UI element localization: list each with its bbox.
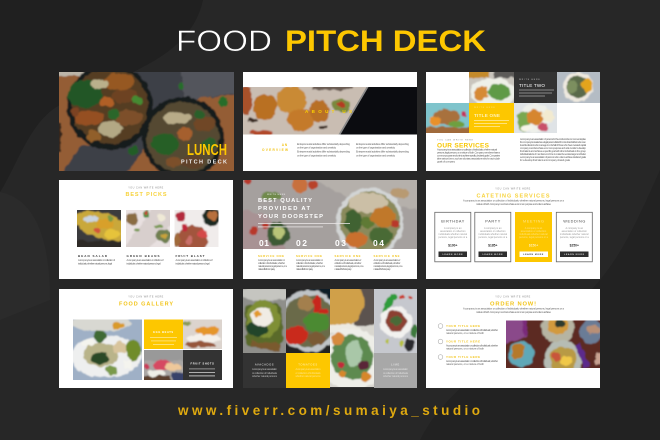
card: wedding: WEDDING: [563, 220, 585, 224]
card: wedding: association or collection: [562, 230, 588, 233]
label: tomatoes: or collection of individuals: [296, 371, 321, 375]
slide: order now: mixture of both. Company members share a common purpose and unite to achieve: [476, 310, 552, 314]
card: party: PARTY: [485, 220, 501, 224]
order item 1: natural persons, or a mixture of both: [446, 331, 485, 335]
photo: fruit blast: [174, 210, 218, 247]
gallery text: egg beats: [150, 337, 177, 345]
slide: about us: ABOUT US: [305, 109, 352, 114]
order item 1: [438, 324, 498, 335]
label: lime: or collection of individuals: [383, 371, 409, 375]
service columns: A company is an association or: [334, 258, 362, 262]
card: meeting: $150+: [529, 244, 538, 248]
service columns: collection of individuals, whether: [374, 261, 401, 265]
hero heading: [258, 194, 350, 227]
gallery text: fruit shots: [189, 368, 215, 376]
slide: food gallery: YOU CAN WRITE HERE: [128, 296, 164, 298]
captions: individuals, whether natural persons, legal: [78, 262, 112, 266]
slide: about us: [243, 72, 417, 171]
card: birthday: individuals whether natural: [439, 233, 467, 236]
photo: grain bowl: [286, 289, 330, 353]
services text: for a develop their talent and company shared goals: [520, 158, 571, 162]
service columns: SERVICE ONE: [296, 254, 322, 258]
service numbers: 01: [259, 238, 269, 248]
service columns: SERVICE ONE: [258, 254, 284, 258]
services text: goals of company: [437, 160, 456, 164]
captions: individuals, whether natural persons, legal: [126, 262, 161, 266]
label: avacados: A company is an association: [252, 367, 278, 371]
service columns: SERVICE ONE: [374, 254, 400, 258]
card: birthday: persons, legal persons or a: [438, 236, 468, 239]
slide: food columns: [243, 289, 417, 388]
card: birthday: [435, 212, 471, 262]
label: avacados: [252, 362, 278, 378]
card: meeting: [515, 212, 552, 262]
card: party: $185+: [488, 244, 498, 248]
service columns: A company is an association or: [296, 258, 323, 262]
order item 1: YOUR TITLE HERE: [446, 324, 480, 328]
service columns: SERVICE ONE: [334, 254, 361, 258]
label: avacados: whether natural persons: [252, 374, 278, 378]
service columns: A company is an association or: [374, 258, 401, 262]
photo: avocado toast: [243, 289, 286, 353]
slide: catering services: YOU CAN WRITE HERE: [495, 188, 531, 190]
service columns: mixture of both company: [296, 267, 314, 271]
about us text columns: [297, 142, 410, 158]
about us text columns: on the type of organization and creativity: [297, 146, 337, 150]
order item 3: YOUR TITLE HERE: [446, 355, 480, 359]
service numbers: 03: [335, 238, 346, 248]
title: PITCH DECK: [285, 25, 486, 58]
website url: www.fiverr.com/sumaiya_studio: [177, 403, 480, 418]
about us text columns: Entrepreneurial activities differ substantially depending: [356, 142, 410, 146]
slide: food gallery: EGG BEATS: [153, 330, 174, 334]
about us text columns: Entrepreneurial activities differ substantially depending: [297, 142, 351, 146]
card: birthday: BIRTHDAY: [441, 220, 465, 224]
slide: lunch cover: PITCH DECK: [181, 160, 227, 166]
services photo grid: TITLE ONE: [474, 113, 500, 118]
photo: bean salad: [77, 210, 121, 247]
card: party: [475, 212, 511, 262]
slide: order now: [426, 289, 600, 388]
gallery photo: main plate: [73, 320, 142, 380]
slide: about us: AN: [282, 143, 288, 147]
order item 2: natural persons, or a mixture of both: [446, 346, 485, 350]
service columns: natural persons, legal persons, or a: [334, 264, 364, 268]
slide: catering services: A company is an association or collection of individuals, whether natural persons, legal persons or a: [463, 198, 565, 202]
service columns: mixture of both company: [334, 267, 352, 271]
gallery photo: fruit shots: [144, 350, 183, 380]
captions: FRUIT BLAST: [176, 254, 205, 258]
service columns: mixture of both company: [258, 267, 276, 271]
captions: A company is an association or collection of: [126, 258, 164, 262]
label: lime: [383, 362, 409, 378]
service columns: collection of individuals, whether: [296, 261, 323, 265]
about us photo: [243, 87, 417, 134]
about us text columns: Entrepreneurial activities differ substantially depending: [356, 150, 410, 154]
card: meeting: LEARN MORE: [523, 253, 544, 256]
service columns: mixture of both company: [374, 267, 391, 271]
title: FOOD: [176, 25, 272, 58]
hero photo: [243, 180, 417, 249]
services photo grid: [414, 60, 615, 146]
service columns: [258, 254, 403, 271]
card: wedding: $250+: [570, 244, 579, 248]
hero heading: WRITE HERE: [267, 194, 286, 196]
photo: bread and salad: [330, 289, 374, 387]
card: party: A company is an: [484, 227, 502, 230]
service columns: collection of individuals, whether: [258, 261, 285, 265]
order item 2: [438, 339, 498, 350]
card: wedding: [556, 212, 592, 262]
captions: individuals, whether natural persons, legal: [176, 262, 210, 266]
captions: GREEN BEANS: [126, 254, 160, 258]
order item 3: natural persons, or a mixture of both: [446, 362, 485, 366]
about us text columns: on the type of organization and creativity: [356, 146, 396, 150]
slide: lunch cover: [59, 72, 234, 171]
about us text columns: on the type of organization and creativity: [297, 154, 337, 158]
card: wedding: LEARN MORE: [564, 253, 585, 256]
slide: our services: OUR SERVICES: [437, 142, 490, 150]
captions: A company is an association or collection of: [176, 258, 213, 262]
label: lime: LIME: [391, 362, 400, 366]
service columns: natural persons, legal persons, or a: [296, 264, 326, 268]
slide: order now: ORDER NOW!: [490, 302, 536, 308]
gallery photo: toast: [183, 320, 222, 349]
card: birthday: $100+: [448, 244, 458, 248]
services text: take various forms, such as voluntary associations which may include: [437, 156, 501, 160]
slide: food gallery: [59, 289, 233, 388]
services text: common purpose and unite to achieve specific, declared goals. Companies: [437, 154, 501, 158]
captions: [78, 254, 213, 266]
order photo: [506, 320, 600, 368]
label: lime: A company is an association: [383, 367, 409, 371]
card: meeting: A company is an: [525, 227, 543, 230]
services text: [437, 137, 587, 164]
card: party: individuals whether natural: [479, 233, 507, 236]
hero heading: BEST QUALITY: [258, 198, 312, 204]
slide: lunch cover: LUNCH: [187, 142, 227, 159]
card: meeting: individuals whether natural: [519, 233, 548, 236]
services text: persons, legal persons, or a mixture of both. Company members share a: [437, 150, 501, 154]
slide: food gallery: FOOD GALLERY: [119, 302, 173, 308]
services text: A company is an association of persons for the conduct of a common enterprise: [520, 137, 587, 141]
services photo grid: WRITE HERE: [519, 79, 541, 81]
services photo grid: TITLE TWO: [519, 83, 545, 88]
services text: the company is created as a legal person distinct from its shareholders who own: [520, 140, 587, 144]
services photo grid: WRITE HERE: [474, 107, 496, 109]
services text: company members share a common purpose and unite in order to develop: [520, 146, 587, 150]
service columns: A company is an association or: [258, 258, 285, 262]
card: birthday: LEARN MORE: [442, 253, 463, 256]
service numbers: 04: [373, 238, 384, 248]
label: tomatoes: whether natural persons: [296, 374, 321, 378]
label: tomatoes: [296, 362, 321, 378]
card: birthday: A company is an: [444, 227, 462, 230]
slide: catering services: CATETING SERVICES: [476, 194, 550, 200]
service columns: collection of individuals, whether: [334, 261, 362, 265]
order item 2: YOUR TITLE HERE: [446, 340, 480, 344]
card: party: association or collection: [480, 230, 506, 233]
label: avacados: or collection of individuals: [252, 371, 278, 375]
photo: green beans: [126, 210, 170, 247]
services text: A company is an association or collection of individuals, whether natural: [437, 148, 497, 152]
about us text columns: Entrepreneurial activities differ substantially depending: [297, 150, 351, 154]
card: wedding: A company is an: [566, 227, 584, 230]
service columns: natural persons, legal persons, or a: [258, 264, 288, 268]
card: party: persons, legal persons or a: [478, 236, 508, 239]
title: [176, 25, 486, 58]
order item 2: A company is an association or collection of individuals, whether: [446, 343, 498, 347]
slide: about us: OVERVIEW: [262, 148, 288, 152]
card: birthday: association or collection: [440, 230, 466, 233]
service columns: natural persons, legal persons, or a: [374, 264, 403, 268]
order item 3: A company is an association or collection of individuals, whether: [446, 359, 498, 363]
slide: best picks: BEST PICKS: [126, 192, 167, 198]
hero heading: YOUR DOORSTEP: [258, 214, 323, 220]
slide: catering services: mixture of both. Company members share a common purpose and unite to achieve: [476, 202, 552, 206]
slide: catering services: [426, 180, 600, 279]
card: wedding: persons, legal persons or a: [560, 236, 589, 239]
card: party: LEARN MORE: [482, 253, 503, 256]
slide: our services: YOU CAN WRITE HERE: [437, 138, 474, 142]
card: wedding: individuals whether natural: [560, 233, 589, 236]
captions: A company is an association or collection of: [78, 258, 115, 262]
services text: it and its directors who manage it on behalf of those who have invested capital: [520, 143, 586, 147]
slide: best picks: YOU CAN WRITE HERE: [128, 186, 164, 190]
service numbers: [259, 238, 384, 248]
photo: lime plate: [374, 289, 417, 353]
slide: our services: [426, 72, 600, 171]
services text: their talents and achieve a specific goal with other individuals in the group: [520, 149, 587, 153]
slide: best picks: [59, 180, 233, 279]
slide: food gallery: FRUIT SHOTS: [191, 362, 214, 366]
slide: best quality: [243, 180, 417, 279]
services text: a company is an association of persons who unite to achieve declared goals: [520, 155, 587, 159]
hero heading: PROVIDED AT: [258, 206, 310, 212]
order item 3: [438, 355, 498, 366]
label: lime: whether natural persons: [383, 374, 409, 378]
order item 1: A company is an association or collection of individuals, whether: [446, 328, 498, 332]
card: meeting: persons, legal persons or a: [519, 236, 549, 239]
label: tomatoes: A company is an association: [296, 367, 321, 371]
label: avacados: AVACADOS: [255, 362, 274, 366]
slide: order now: YOU CAN WRITE HERE: [495, 296, 531, 298]
services text: individual talents of members combine to make the venture larger and better: [520, 152, 586, 156]
card: meeting: MEETING: [523, 220, 544, 224]
about us text columns: on the type of organization and creativity: [356, 154, 396, 158]
card: meeting: association or collection: [521, 230, 547, 233]
service numbers: 02: [296, 238, 307, 248]
label: tomatoes: TOMATOES: [298, 362, 318, 366]
captions: BEAN SALAD: [78, 254, 108, 258]
slide: order now: A company is an association or collection of individuals, whether natural persons, legal persons or a: [463, 306, 565, 310]
